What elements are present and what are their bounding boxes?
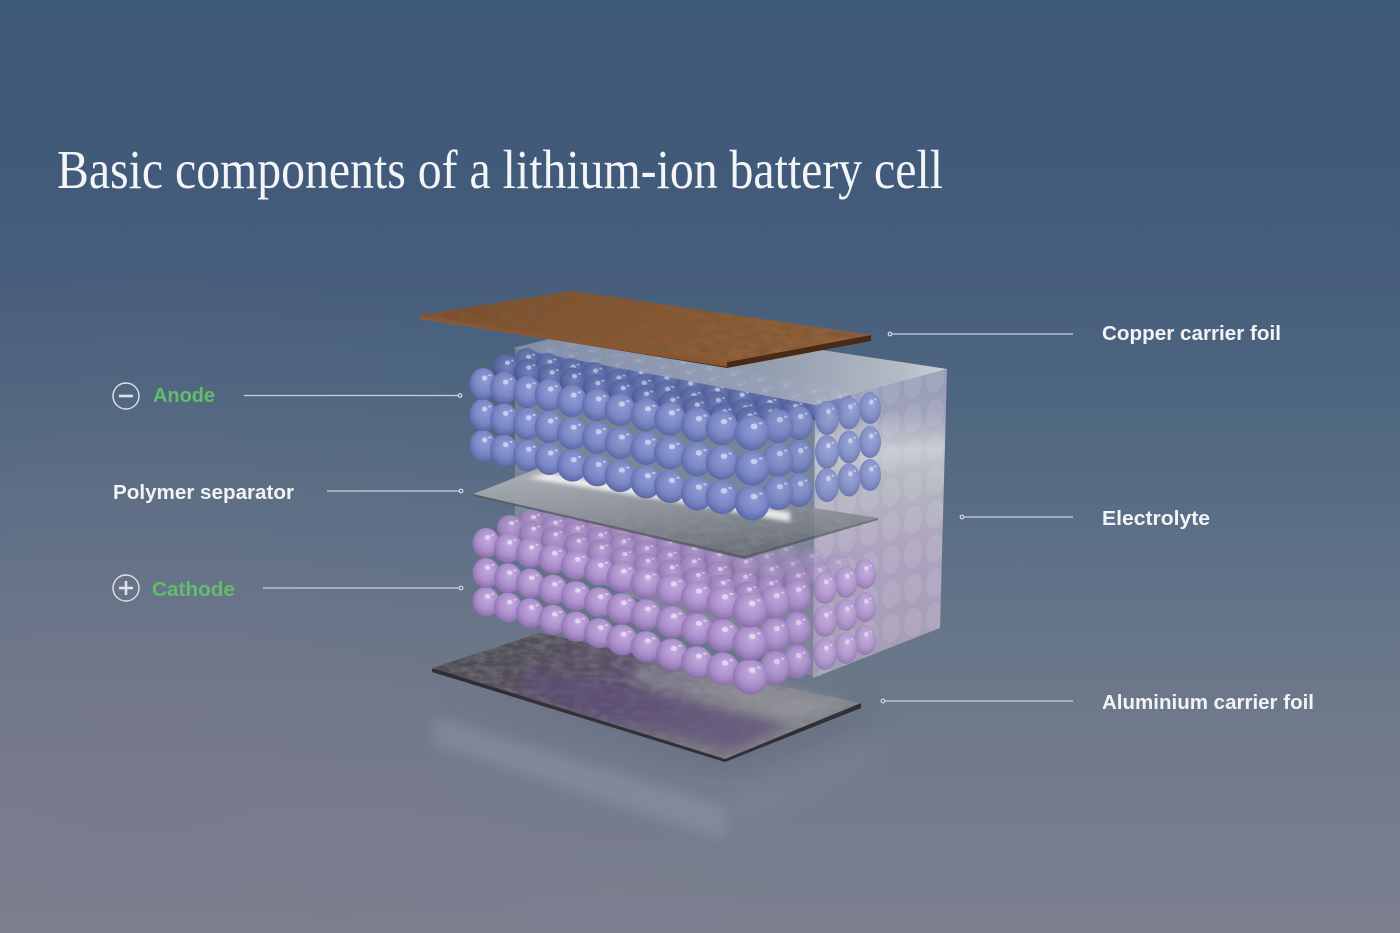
anode spheres bbox=[470, 320, 947, 521]
icon: plus bbox=[113, 575, 139, 601]
polymer separator bbox=[473, 466, 878, 559]
label: copper carrier foil: Copper carrier foil bbox=[1102, 323, 1281, 345]
label: electrolyte bbox=[960, 508, 1210, 530]
label: aluminium carrier foil bbox=[881, 692, 1314, 714]
icon: minus bbox=[113, 383, 139, 409]
title: Basic components of a lithium-ion battery cell bbox=[57, 139, 943, 200]
label: cathode bbox=[113, 575, 463, 601]
label: anode: Anode bbox=[153, 385, 215, 407]
label: cathode: Cathode bbox=[152, 579, 235, 601]
electrolyte top face bbox=[513, 320, 947, 405]
label: anode bbox=[113, 383, 462, 409]
electrolyte front-right glass overlay bbox=[813, 369, 947, 678]
copper carrier foil bbox=[420, 291, 871, 368]
label: polymer separator bbox=[113, 482, 463, 504]
floor reflection and shadow bbox=[434, 690, 880, 840]
electrolyte: translucent box behind the spheres bbox=[515, 348, 947, 678]
aluminium carrier foil bbox=[432, 633, 861, 762]
label: electrolyte: Electrolyte bbox=[1102, 508, 1210, 530]
label: aluminium carrier foil: Aluminium carrier foil bbox=[1102, 692, 1314, 714]
cathode spheres bbox=[472, 494, 876, 695]
label: copper carrier foil bbox=[888, 323, 1281, 345]
label: polymer separator: Polymer separator bbox=[113, 482, 294, 504]
